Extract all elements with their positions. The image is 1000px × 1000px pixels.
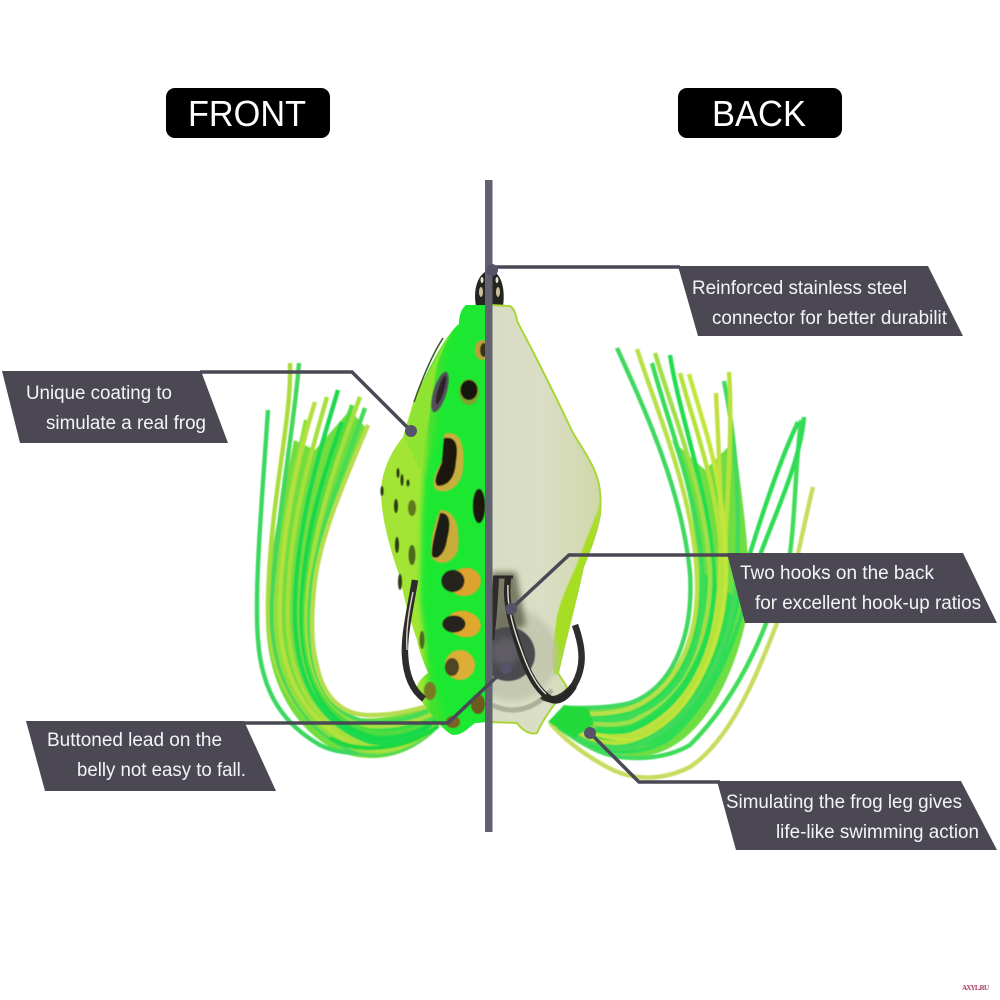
leader line bbox=[200, 372, 411, 431]
heading: FRONT: FRONT bbox=[188, 93, 306, 134]
label text: Buttoned lead on the bbox=[47, 730, 222, 751]
connector eye at nose bbox=[475, 270, 504, 306]
front half body bbox=[380, 305, 489, 735]
dot bbox=[500, 662, 512, 674]
right skirt strands bbox=[548, 348, 813, 778]
callout: buttoned lead bbox=[26, 662, 512, 791]
callout: two hooks bbox=[505, 553, 997, 623]
label text: Simulating the frog leg gives bbox=[726, 792, 962, 813]
label text: Reinforced stainless steel bbox=[692, 278, 907, 299]
heading: BACK: BACK bbox=[712, 93, 806, 134]
callout: coating bbox=[2, 371, 417, 443]
callout: connector bbox=[486, 264, 963, 336]
label box bbox=[717, 781, 997, 850]
left skirt strands bbox=[257, 363, 440, 758]
label text: belly not easy to fall. bbox=[77, 760, 246, 781]
leader line bbox=[491, 265, 680, 269]
eye bbox=[428, 370, 452, 414]
label text: connector for better durabilit bbox=[712, 308, 948, 329]
label box bbox=[26, 721, 276, 791]
spots bbox=[380, 340, 489, 728]
green shoulder band bbox=[420, 305, 488, 732]
leader line bbox=[590, 733, 720, 782]
label box bbox=[727, 553, 997, 623]
dot bbox=[486, 264, 498, 276]
label text: simulate a real frog bbox=[46, 413, 206, 434]
lime upper rim bbox=[404, 328, 455, 470]
right skirt body fill bbox=[560, 440, 749, 756]
dark rim bbox=[414, 338, 443, 402]
belly shading bbox=[492, 568, 562, 713]
left skirt body fill bbox=[266, 410, 440, 758]
callout: frog leg bbox=[584, 727, 997, 850]
heading: BACK bbox=[678, 88, 842, 138]
label text: for excellent hook-up ratios bbox=[755, 593, 981, 614]
leader line bbox=[240, 668, 506, 723]
frog lure bbox=[380, 270, 601, 735]
label text: Two hooks on the back bbox=[740, 563, 934, 584]
dot bbox=[505, 603, 517, 615]
centre divider bar bbox=[485, 180, 492, 832]
hooks: back side bbox=[491, 577, 582, 700]
dot bbox=[584, 727, 596, 739]
label box bbox=[678, 266, 963, 336]
label box bbox=[2, 371, 228, 443]
leader line bbox=[511, 555, 730, 609]
heading: FRONT bbox=[166, 88, 330, 138]
dot bbox=[405, 425, 417, 437]
label text: Unique coating to bbox=[26, 383, 172, 404]
lime flank bbox=[552, 500, 601, 676]
watermark: AXYL.RU bbox=[962, 984, 989, 992]
label text: life-like swimming action bbox=[776, 822, 979, 843]
back half body bbox=[492, 304, 602, 734]
hook: left side bbox=[405, 580, 424, 699]
